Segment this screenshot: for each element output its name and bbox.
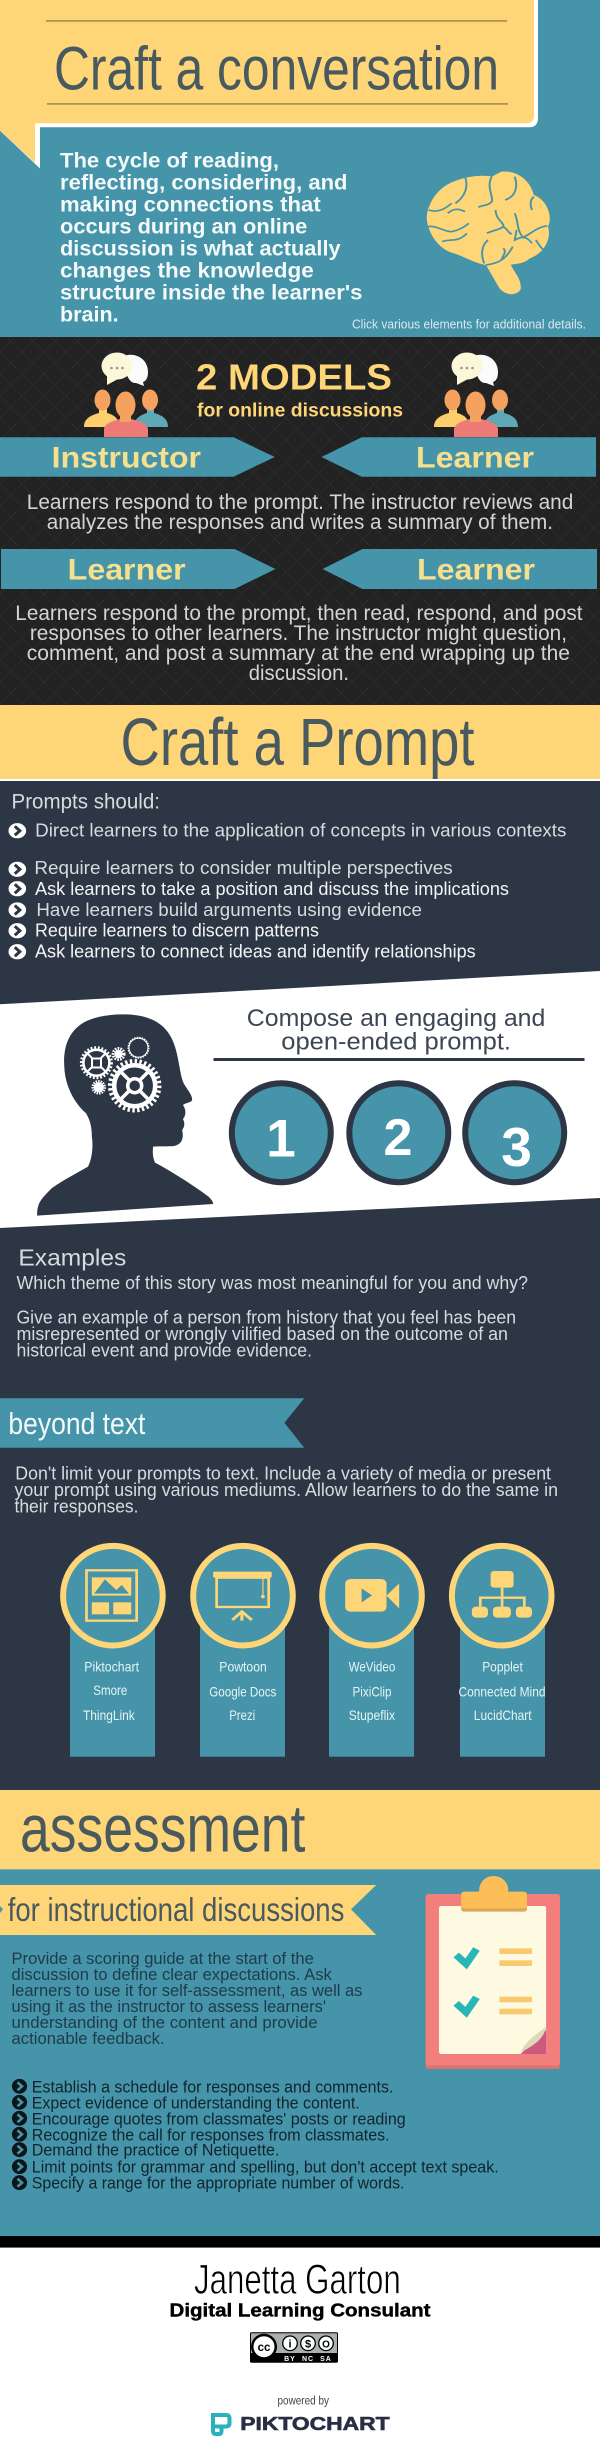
beyond text paragraph xyxy=(14,1463,558,1517)
ribbon: beyond text xyxy=(0,1398,304,1448)
note: click various elements: Click various elements for additional details. xyxy=(352,317,586,331)
prompt heading: Compose an engaging and xyxy=(247,1005,545,1032)
icon: video camera xyxy=(345,1579,399,1612)
assessment paragraph: actionable feedback. xyxy=(12,2029,165,2048)
assessment paragraph: discussion to define clear expectations. Ask xyxy=(12,1965,332,1984)
model one description xyxy=(27,491,573,534)
intro text: brain. xyxy=(60,304,119,327)
piktochart logo: PIKTOCHART xyxy=(240,2414,390,2434)
ribbon: for instructional discussions: for instructional discussions xyxy=(8,1891,344,1928)
tool card: infographics xyxy=(63,1546,163,1757)
list: prompts should: Prompts should: xyxy=(12,789,160,813)
title: Craft a conversation xyxy=(54,34,499,102)
piktochart logo xyxy=(213,2414,390,2434)
intro text: The cycle of reading, xyxy=(60,150,279,173)
footer xyxy=(0,2236,600,2457)
examples text xyxy=(16,1245,528,1361)
creative commons badge: BY xyxy=(284,2356,296,2363)
assessment checklist: Encourage quotes from classmates' posts or reading xyxy=(32,2109,406,2128)
assessment checklist: Specify a range for the appropriate number of words. xyxy=(32,2173,405,2192)
prompt heading xyxy=(247,1005,545,1055)
tool names: ThingLink xyxy=(83,1707,136,1723)
ribbon: instructor xyxy=(0,437,275,477)
model two description xyxy=(15,602,583,685)
section: assessment header xyxy=(0,1790,600,1869)
assessment checklist xyxy=(12,2077,499,2192)
tool names: Popplet xyxy=(482,1659,523,1675)
ribbon: for instructional discussions xyxy=(0,1885,376,1935)
tool names: Prezi xyxy=(229,1707,255,1723)
creative commons badge: $ xyxy=(305,2338,311,2350)
section: assessment body xyxy=(0,1869,600,2236)
model two description: responses to other learners. The instructor might question, xyxy=(30,622,567,645)
examples text: historical event and provide evidence. xyxy=(16,1341,312,1361)
tool names xyxy=(209,1659,276,1723)
heading: assessment: assessment xyxy=(20,1792,306,1867)
prompt heading: open-ended prompt. xyxy=(281,1028,511,1055)
list: prompts should: Ask learners to take a position and discuss the implications xyxy=(35,879,509,899)
tool names: Connected Mind xyxy=(458,1684,546,1700)
model two description: comment, and post a summary at the end wrapping up the xyxy=(27,642,570,665)
creative commons badge: O xyxy=(322,2340,330,2350)
list: prompts should: Have learners build arguments using evidence xyxy=(36,899,422,920)
creative commons badge: i xyxy=(288,2338,292,2350)
icon: projector screen xyxy=(213,1572,272,1621)
examples text: Which theme of this story was most meaningful for you and why? xyxy=(16,1273,528,1293)
list: prompts should xyxy=(8,789,566,962)
section: craft a conversation xyxy=(0,0,600,337)
ribbon: learner left xyxy=(1,549,276,589)
assessment checklist: Expect evidence of understanding the content. xyxy=(32,2093,360,2112)
ribbon: instructor: Instructor xyxy=(52,441,201,474)
icon: head with gears xyxy=(37,1014,213,1216)
ribbon: learner xyxy=(322,437,596,477)
section: 2 models xyxy=(0,337,600,705)
intro text: structure inside the learner's xyxy=(60,282,362,305)
intro text: occurs during an online xyxy=(60,216,307,239)
author title: Digital Learning Consulant xyxy=(170,2301,430,2321)
creative commons badge: cc xyxy=(258,2342,271,2354)
subheading: for online discussions xyxy=(197,401,403,422)
icon: people talking right xyxy=(434,352,518,437)
icon: org chart xyxy=(472,1571,532,1618)
tool names: PixiClip xyxy=(352,1684,392,1700)
ribbon: learner left: Learner xyxy=(68,553,186,586)
creative commons badge xyxy=(250,2332,338,2363)
assessment checklist: Limit points for grammar and spelling, but don't accept text speak. xyxy=(32,2157,499,2176)
tool names: Powtoon xyxy=(219,1659,267,1675)
number badge 2 xyxy=(349,1083,448,1182)
icon: brain xyxy=(427,171,550,294)
number badge 2: 2 xyxy=(384,1109,412,1167)
number badge 1: 1 xyxy=(266,1110,296,1169)
tool names: LucidChart xyxy=(474,1707,532,1723)
beyond text paragraph: your prompt using various mediums. Allow learners to do the same in xyxy=(14,1480,558,1500)
model two description: discussion. xyxy=(249,662,349,685)
assessment checklist: Recognize the call for responses from classmates. xyxy=(32,2125,390,2144)
creative commons badge: NC xyxy=(302,2356,314,2363)
tool names xyxy=(349,1659,395,1723)
tool names xyxy=(83,1659,139,1723)
tool card: presentations xyxy=(193,1546,293,1757)
panel: compose a prompt band xyxy=(0,971,600,1228)
speech bubble header xyxy=(0,0,538,168)
assessment checklist: Establish a schedule for responses and comments. xyxy=(32,2077,393,2096)
ribbon: learner right xyxy=(323,549,597,589)
tool card: video xyxy=(322,1546,422,1757)
examples text: misrepresented or wrongly vilified based on the outcome of an xyxy=(16,1324,508,1344)
tool names xyxy=(458,1659,546,1723)
heading: 2 models: 2 MODELS xyxy=(196,356,392,397)
number badge 3: 3 xyxy=(501,1116,532,1178)
model two description: Learners respond to the prompt, then read, respond, and post xyxy=(15,602,583,625)
section: craft a prompt header xyxy=(0,705,600,781)
number badge 1 xyxy=(232,1083,331,1182)
model one description: Learners respond to the prompt. The instructor reviews and xyxy=(27,491,573,514)
ribbon: learner: Learner xyxy=(416,441,534,474)
ribbon: learner right: Learner xyxy=(417,553,535,586)
assessment paragraph: using it as the instructor to assess learners' xyxy=(12,1997,326,2016)
intro text: making connections that xyxy=(60,194,321,217)
number badge 3 xyxy=(465,1083,564,1182)
heading: craft a prompt: Craft a Prompt xyxy=(120,705,475,780)
assessment paragraph xyxy=(12,1949,362,2048)
intro text xyxy=(60,150,362,327)
icon: infographic layout xyxy=(86,1570,137,1621)
intro text: reflecting, considering, and xyxy=(60,172,348,195)
tool card: mind maps xyxy=(452,1546,552,1757)
section: dark panel background xyxy=(0,781,600,1790)
assessment paragraph: learners to use it for self-assessment, as well as xyxy=(12,1981,362,2000)
beyond text paragraph: their responses. xyxy=(14,1497,138,1517)
author name: Janetta Garton xyxy=(194,2255,401,2302)
tool names: Google Docs xyxy=(209,1684,276,1700)
list: prompts should: Direct learners to the application of concepts in various contexts xyxy=(35,820,566,841)
model one description: analyzes the responses and writes a summary of them. xyxy=(47,511,553,534)
assessment paragraph: Provide a scoring guide at the start of the xyxy=(12,1949,314,1968)
intro text: discussion is what actually xyxy=(60,238,341,261)
examples text: Examples xyxy=(18,1245,126,1271)
tool names: Stupeflix xyxy=(349,1707,395,1723)
list: prompts should: Ask learners to connect ideas and identify relationships xyxy=(35,942,476,962)
beyond text paragraph: Don't limit your prompts to text. Include a variety of media or present xyxy=(15,1463,551,1483)
creative commons badge: SA xyxy=(320,2356,332,2363)
icon: clipboard checklist xyxy=(426,1876,560,2069)
assessment paragraph: understanding of the content and provide xyxy=(12,2013,318,2032)
examples text: Give an example of a person from history that you feel has been xyxy=(16,1307,516,1327)
tool names: WeVideo xyxy=(349,1659,395,1675)
list: prompts should: Require learners to consider multiple perspectives xyxy=(34,857,453,878)
icon: people talking left xyxy=(84,352,168,437)
intro text: changes the knowledge xyxy=(60,260,314,283)
assessment checklist: Demand the practice of Netiquette. xyxy=(32,2140,279,2159)
list: prompts should: Require learners to discern patterns xyxy=(35,921,319,941)
powered by: powered by xyxy=(278,2395,329,2407)
tool names: Smore xyxy=(93,1682,127,1698)
ribbon: beyond text: beyond text xyxy=(8,1406,146,1441)
tool names: Piktochart xyxy=(84,1659,139,1675)
